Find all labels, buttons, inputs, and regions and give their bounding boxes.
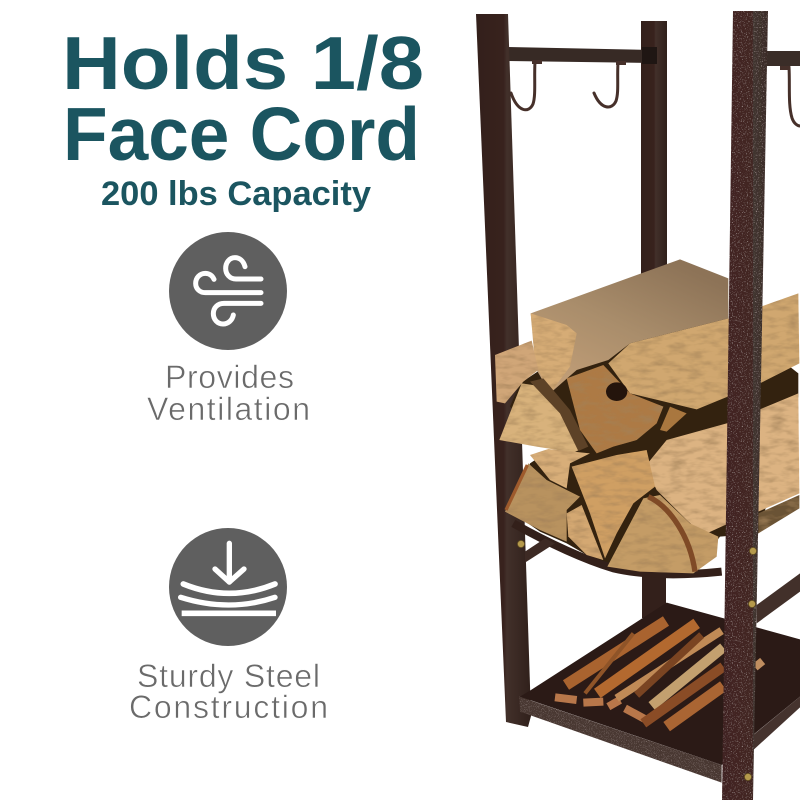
brass bolts xyxy=(517,540,757,781)
text: Provides Ventilation: Provides xyxy=(165,359,294,395)
icon: downward arrow on steel layers in grey circle xyxy=(169,528,287,646)
small left log xyxy=(495,341,538,403)
title: Holds 1/8 Face Cord: Holds 1/8 xyxy=(62,21,424,105)
flat upper wedge xyxy=(530,449,590,488)
lower centre log xyxy=(607,495,718,573)
centre dark log xyxy=(567,365,663,453)
left wedge xyxy=(499,383,587,453)
top log xyxy=(531,259,728,393)
text: Provides Ventilation xyxy=(147,359,310,427)
centre wedge xyxy=(572,450,655,558)
back post of rack xyxy=(641,21,667,618)
large right log xyxy=(645,393,799,535)
lower left log xyxy=(505,463,580,542)
lower side brace xyxy=(525,538,555,563)
text: Sturdy Steel Construction xyxy=(129,658,328,725)
text: Sturdy Steel Construction: Construction xyxy=(129,689,328,725)
title: Holds 1/8 Face Cord: Face Cord xyxy=(63,92,420,176)
left post of rack xyxy=(476,14,531,727)
small wedge xyxy=(567,505,603,560)
upper right log xyxy=(608,293,799,409)
front post of rack with hammered finish xyxy=(722,11,768,800)
subtitle: capacity: 200 lbs Capacity xyxy=(101,175,371,213)
bottom shelf with side rails xyxy=(519,573,800,783)
text: Provides Ventilation: Ventilation xyxy=(147,391,310,427)
upper cross bar with hooks xyxy=(508,47,800,126)
bark end behind right log xyxy=(758,495,799,533)
dark backing behind log pile xyxy=(510,318,798,573)
kindling sticks on shelf xyxy=(555,621,763,727)
firewood logs on curved rack xyxy=(495,259,799,574)
text: Sturdy Steel Construction: Sturdy Steel xyxy=(137,658,320,694)
icon: wind in grey circle xyxy=(169,232,287,350)
title: Holds 1/8 Face Cord xyxy=(62,21,424,176)
curved log holder bar xyxy=(513,523,722,574)
